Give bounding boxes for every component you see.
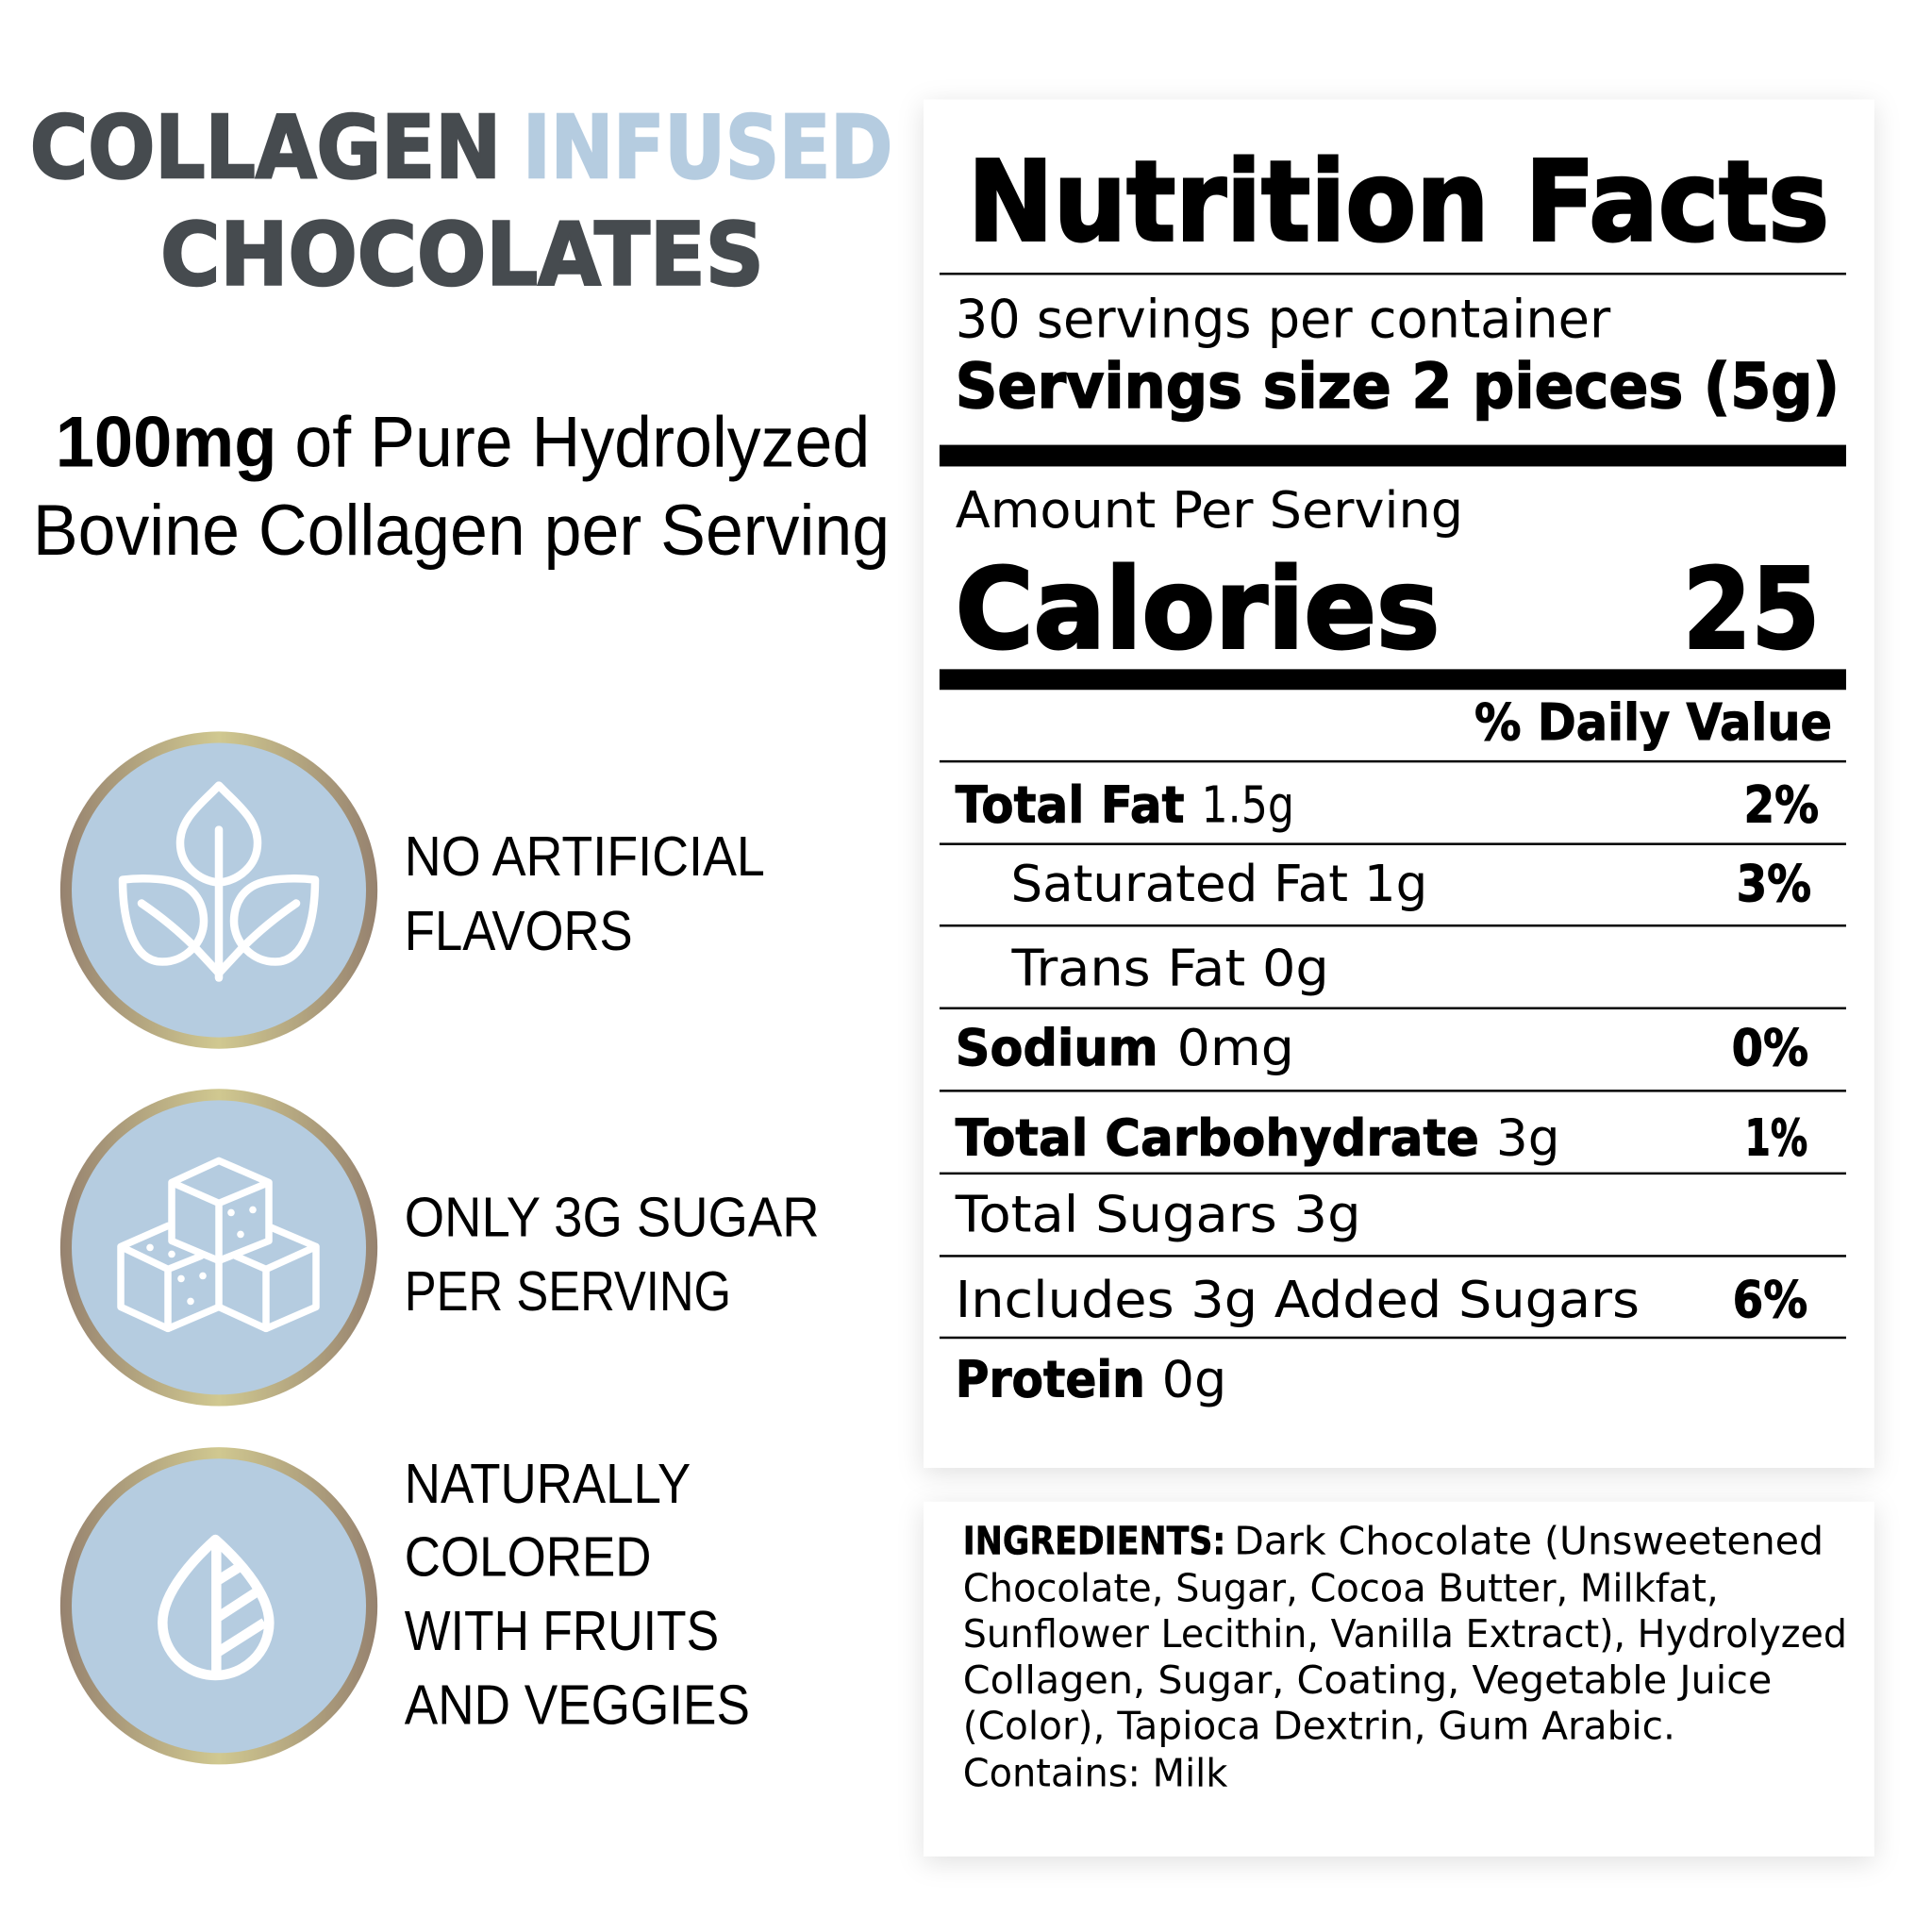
feature text: naturally colored (405, 1452, 750, 1737)
feature text: only 3g sugar: ONLY 3G SUGAR (405, 1185, 820, 1248)
badge: only 3g sugar (60, 1089, 377, 1407)
feature text: only 3g sugar: PER SERVING (405, 1259, 731, 1323)
row: total carbohydrate: 1% (1745, 1108, 1807, 1168)
feature text: naturally colored: COLORED (405, 1524, 651, 1588)
serving info (956, 290, 1840, 423)
row: total carbohydrate: Total Carbohydrate (956, 1108, 1479, 1168)
row: saturated fat (1011, 854, 1811, 913)
heading: nutrition facts: Nutrition Facts (968, 138, 1829, 267)
icon: sugar cubes (121, 1160, 316, 1328)
feature text: no artificial flavors: NO ARTIFICIAL (405, 824, 765, 888)
title (30, 97, 892, 305)
row: total carbohydrate: 3g (1496, 1108, 1560, 1168)
calories: Calories (956, 544, 1440, 674)
panel: nutrition facts (924, 99, 1874, 1468)
subtitle: of Pure Hydrolyzed (294, 403, 870, 482)
row: protein: Protein (956, 1349, 1145, 1408)
row: sodium: 0mg (1177, 1018, 1294, 1077)
amount per serving: Amount Per Serving (956, 480, 1463, 540)
ingredients text (963, 1519, 1847, 1795)
feature text: no artificial flavors (405, 824, 765, 962)
feature text: only 3g sugar (405, 1185, 820, 1323)
row: sodium: 0% (1732, 1018, 1808, 1077)
ingredients text: INGREDIENTS: (963, 1519, 1225, 1564)
ingredients text: Collagen, Sugar, Coating, Vegetable Juice (963, 1657, 1772, 1703)
ingredients text: Sunflower Lecithin, Vanilla Extract), Hydrolyzed (963, 1611, 1847, 1657)
title: COLLAGEN (30, 97, 501, 198)
subtitle (33, 403, 890, 571)
ingredients text: Chocolate, Sugar, Cocoa Butter, Milkfat, (963, 1565, 1719, 1610)
row: total fat: Total Fat (956, 775, 1185, 835)
feature text: naturally colored: WITH FRUITS (405, 1599, 719, 1662)
subtitle: Bovine Collagen per Serving (33, 491, 890, 571)
row: sodium: Sodium (956, 1018, 1158, 1077)
calories (956, 544, 1820, 674)
ingredients text: Dark Chocolate (Unsweetened (1234, 1519, 1824, 1564)
feature text: naturally colored: NATURALLY (405, 1452, 691, 1515)
serving info: Servings size 2 pieces (5g) (956, 351, 1840, 423)
row: total carbohydrate (956, 1108, 1807, 1168)
row: sodium (956, 1018, 1808, 1077)
badge: naturally colored (60, 1447, 377, 1764)
row: added sugars: Includes 3g Added Sugars (956, 1270, 1640, 1329)
subtitle: 100mg (56, 403, 276, 482)
row: total fat: 1.5g (1201, 775, 1294, 835)
title: INFUSED (523, 97, 892, 198)
title: CHOCOLATES (160, 204, 764, 305)
calories: 25 (1683, 544, 1820, 674)
daily value header: % Daily Value (1474, 692, 1832, 752)
badge: no artificial flavors (60, 731, 377, 1049)
panel: ingredients (924, 1502, 1874, 1857)
icon: leaf drop (162, 1540, 269, 1675)
row: saturated fat: 3% (1737, 854, 1811, 913)
serving info: 30 servings per container (956, 290, 1610, 351)
row: protein: 0g (1162, 1349, 1226, 1408)
row: saturated fat: Saturated Fat 1g (1011, 854, 1427, 913)
feature text: naturally colored: AND VEGGIES (405, 1674, 750, 1737)
row: trans fat: Trans Fat 0g (1010, 939, 1329, 998)
row: total sugars: Total Sugars 3g (955, 1184, 1361, 1243)
row: added sugars: 6% (1733, 1270, 1807, 1329)
row: total fat (956, 775, 1819, 835)
icon: three leaves (123, 786, 315, 978)
row: total fat: 2% (1744, 775, 1819, 835)
feature text: no artificial flavors: FLAVORS (405, 899, 633, 962)
ingredients text: Contains: Milk (963, 1750, 1228, 1795)
ingredients text: (Color), Tapioca Dextrin, Gum Arabic. (963, 1704, 1675, 1749)
